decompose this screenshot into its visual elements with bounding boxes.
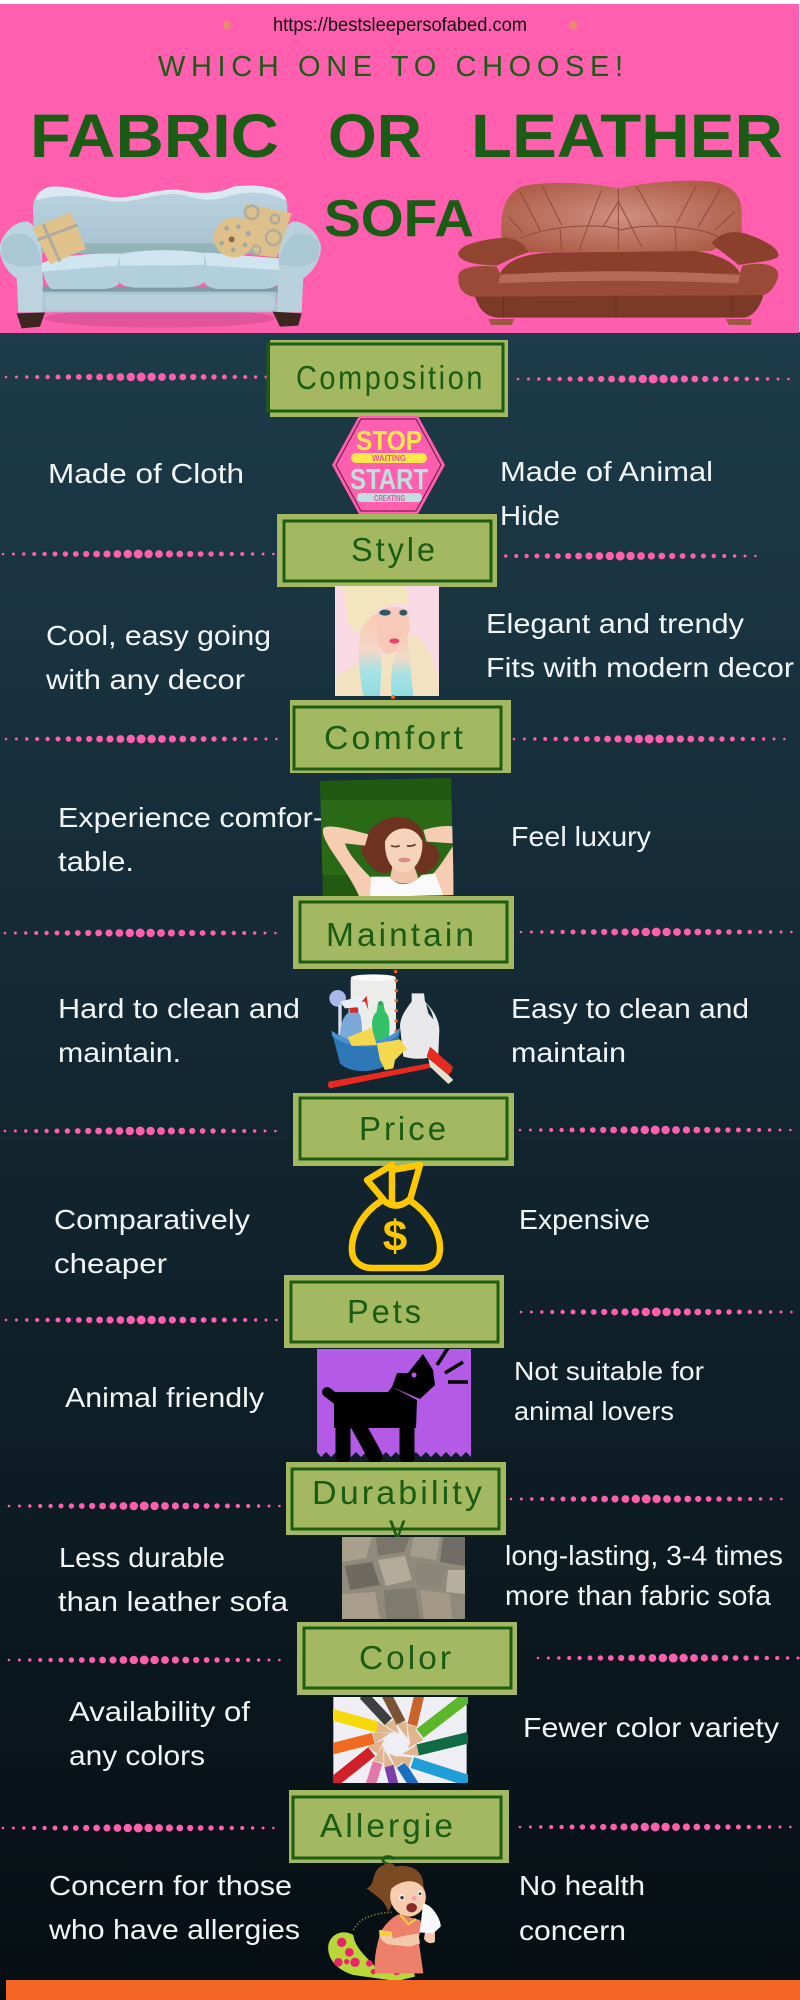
dotted divider right [519,1126,792,1134]
title: sofa: SOFA [324,190,474,248]
heading box [286,1462,506,1545]
title: LEATHER [471,102,783,170]
fabric text: Availability of [69,1696,250,1727]
heading box [284,1275,504,1348]
heading box [293,896,514,969]
heading box [277,514,497,587]
section: price [4,1093,792,1279]
title: OR [328,102,422,170]
heading box: s [380,1843,400,1880]
header panel [0,4,799,333]
icon: stop start sign: WAITING [372,454,406,463]
fabric text: Concern for those [49,1870,292,1901]
fabric text [69,1696,250,1771]
leather text: Not suitable for [514,1356,704,1386]
icon: leather sofa [458,181,778,325]
leather text: animal lovers [514,1396,674,1426]
leather text: Feel luxury [511,821,651,852]
leather text: concern [519,1915,626,1946]
leather text: Expensive [519,1204,650,1235]
dotted divider right [520,1308,793,1316]
dotted divider right [513,734,786,744]
icon: fabric sofa [0,186,321,328]
fabric text [54,1204,250,1279]
title [30,102,783,170]
fabric text: table. [58,846,134,877]
fabric text [58,1542,288,1617]
fabric text [58,802,323,877]
heading box: Allergie [320,1807,456,1844]
dotted divider right [520,928,793,936]
heading box: Style [351,531,438,568]
leather text [505,1540,783,1611]
heading box: Price [359,1110,449,1147]
dotted divider right [537,1654,800,1662]
leather text: Hide [500,500,560,531]
fabric text: Hard to clean and [58,993,300,1024]
fabric text: with any decor [45,664,245,695]
section: composition [5,340,790,531]
fabric text: cheaper [54,1248,167,1279]
section: pets [5,1275,793,1457]
photo: woman with hat [335,586,439,696]
section: color [8,1622,800,1787]
leather text [486,608,794,683]
dotted divider left [4,928,277,938]
fabric text: Made of Cloth [48,458,244,489]
heading box: Comfort [324,719,466,756]
icon: money bag: $ [383,1212,407,1261]
icon: stop start sign: START [350,464,428,496]
heading box: Durability [312,1474,485,1511]
dotted divider right [517,374,790,384]
section: allergies [2,1790,792,1981]
icon: stop start sign: STOP [356,425,422,456]
dotted divider left [8,1502,281,1510]
heading box [290,700,511,773]
photo: colored pencils [330,1695,468,1787]
decorative url dots [223,20,577,30]
subtitle: WHICH ONE TO CHOOSE! [158,51,623,83]
dotted divider left [5,372,278,382]
heading box [297,1622,517,1695]
leather text: more than fabric sofa [505,1580,771,1611]
leather text: Fits with modern decor [486,652,794,683]
dotted divider right [510,1494,783,1504]
leather text: Easy to clean and [511,993,749,1024]
fabric text [48,1870,300,1945]
icon: sneezing girl [328,1864,441,1981]
fabric text [45,620,271,695]
fabric text: Less durable [59,1542,225,1573]
dotted divider left [5,1316,278,1324]
fabric text: who have allergies [48,1914,300,1945]
section: style [2,514,794,699]
photo: woman on grass [318,777,455,900]
section: comfort [5,700,786,900]
fabric text [58,993,300,1068]
dotted divider left [5,734,278,744]
icon: cleaning supplies [328,970,453,1088]
section: maintain [4,896,793,1088]
decorative orange dot [391,695,395,699]
fabric text: maintain. [58,1037,181,1068]
icon: barking dog on purple [317,1348,471,1457]
dotted divider left [2,550,275,558]
dotted divider right [484,552,757,560]
dotted divider left [8,1656,281,1664]
leather text [519,1870,645,1946]
orange footer bar [6,1980,800,2000]
leather text: Elegant and trendy [486,608,744,639]
fabric text: Comparatively [54,1204,250,1235]
dotted divider right [519,1822,792,1832]
icon: stop start sign: CREATING [374,494,405,503]
heading box: Pets [347,1293,424,1330]
leather text [500,456,713,531]
fabric text: than leather sofa [58,1586,288,1617]
fabric text: Experience comfor- [58,802,323,833]
icon: stop start sign [332,416,445,514]
heading box [268,340,508,417]
fabric text: any colors [69,1740,205,1771]
heading box: Color [359,1639,454,1676]
dotted divider left [2,1824,275,1832]
leather text: No health [519,1870,645,1901]
photo: stone wall [342,1537,465,1619]
leather text: Fewer color variety [523,1712,779,1743]
icon: money bag [352,1165,440,1268]
heading box [289,1790,509,1880]
title: FABRIC [30,102,279,170]
heading box [293,1093,514,1166]
fabric text: Animal friendly [65,1382,264,1413]
dotted divider left [4,1126,277,1136]
heading box: Maintain [326,916,477,953]
section: durability [8,1462,783,1619]
leather text [511,993,749,1068]
url: https://bestsleepersofabed.com [273,15,527,36]
leather text: long-lasting, 3-4 times [505,1540,783,1571]
heading box: Composition [296,359,485,396]
fabric text: Cool, easy going [46,620,271,651]
leather text: maintain [511,1037,626,1068]
heading box: y [389,1508,408,1545]
leather text: Made of Animal [500,456,713,487]
leather text [514,1356,704,1426]
